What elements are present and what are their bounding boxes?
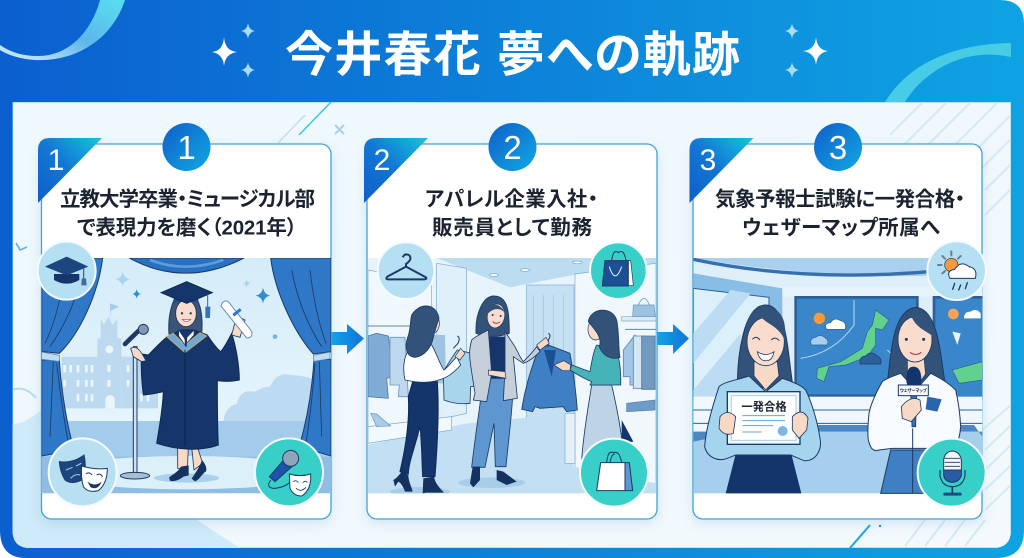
- badge number 2: [488, 123, 536, 171]
- woman center: [470, 296, 549, 487]
- arrow: step 2 to step 3: [656, 324, 689, 354]
- icon: studio microphone: [918, 439, 986, 507]
- card 2 heading: [425, 188, 598, 240]
- sparkles: [116, 272, 130, 286]
- card 1 heading: で表現力を磨く（2021年）: [77, 216, 297, 240]
- graduate figure: [131, 282, 252, 481]
- icon: hanger: [378, 242, 434, 299]
- card 3: weather: [690, 123, 986, 519]
- icon: theatre masks: [49, 438, 117, 506]
- right curtain: [271, 258, 331, 354]
- desk bands: [693, 397, 982, 432]
- icon: sun and cloud: [927, 241, 986, 300]
- ground: [42, 421, 331, 457]
- title: 今井春花 夢への軌跡: [285, 29, 740, 82]
- badge number 3: 3: [829, 129, 847, 166]
- icon: graduation cap: [38, 242, 96, 300]
- left rack clothes: [368, 326, 410, 327]
- badge number 3: [814, 123, 862, 171]
- ribbon number 1: [38, 138, 102, 203]
- floor: [368, 413, 656, 493]
- ribbon number 3: 3: [700, 144, 716, 177]
- campus building: [62, 303, 158, 408]
- card 1 heading: 立教大学卒業・ミュージカル部: [60, 188, 315, 211]
- illustration: weather studio: [693, 241, 986, 507]
- diploma: [221, 301, 252, 338]
- ribbon number 3: [690, 138, 754, 203]
- left curtain: [42, 258, 103, 353]
- card 2 heading: 販売員として勤務: [432, 216, 592, 240]
- fitting curtain: [527, 285, 574, 418]
- weather map screen: [796, 297, 917, 396]
- clouds: [223, 374, 312, 422]
- held shirt: [443, 350, 480, 404]
- ribbon number 2: [364, 138, 428, 203]
- navy jacket: [522, 345, 577, 412]
- swirl: top right: [885, 43, 1011, 102]
- card 1: graduation: [38, 123, 331, 519]
- woman left: [393, 306, 465, 493]
- card 2 heading: アパレル企業入社・: [425, 188, 598, 211]
- woman with certificate: 一発合格: [741, 400, 787, 414]
- badge number 1: [162, 123, 210, 171]
- hatching top right: [890, 102, 1011, 215]
- weather presenter: [868, 307, 961, 493]
- ribbon number 2: 2: [374, 144, 390, 177]
- woman right: [554, 310, 633, 460]
- icon: white shopping bag: [580, 439, 648, 507]
- weather presenter: ウェザーマップ: [900, 387, 927, 394]
- certificate: [727, 392, 800, 444]
- card 1 heading: [60, 188, 315, 240]
- card 2: apparel: [364, 123, 657, 519]
- sparkles: left of title: [212, 23, 255, 78]
- card 3 heading: 気象予報士試験に一発合格・: [715, 187, 965, 211]
- illustration: graduation on stage: [38, 242, 331, 506]
- sparkles: right of title: [785, 23, 828, 78]
- stage valance: [129, 258, 244, 273]
- second weather screen: [934, 297, 984, 399]
- microphone stand: [120, 324, 150, 479]
- woman with certificate: [705, 305, 820, 493]
- right rack clothes: [625, 328, 656, 330]
- card 3 heading: [715, 187, 965, 240]
- icon: blue shopping bag: [590, 242, 647, 299]
- illustration: apparel shop: [368, 242, 656, 507]
- hatching bottom right: [905, 405, 1011, 546]
- icon: microphone and mask: [255, 438, 323, 506]
- badge number 2: 2: [503, 129, 522, 166]
- swirl: top left: [0, 0, 125, 60]
- arrow: step 1 to step 2: [331, 324, 364, 354]
- card 3 heading: ウェザーマップ所属へ: [742, 216, 940, 240]
- badge number 1: 1: [177, 129, 196, 166]
- ceiling lights: [489, 274, 499, 276]
- ribbon number 1: 1: [48, 144, 64, 177]
- main content panel: [12, 102, 1011, 548]
